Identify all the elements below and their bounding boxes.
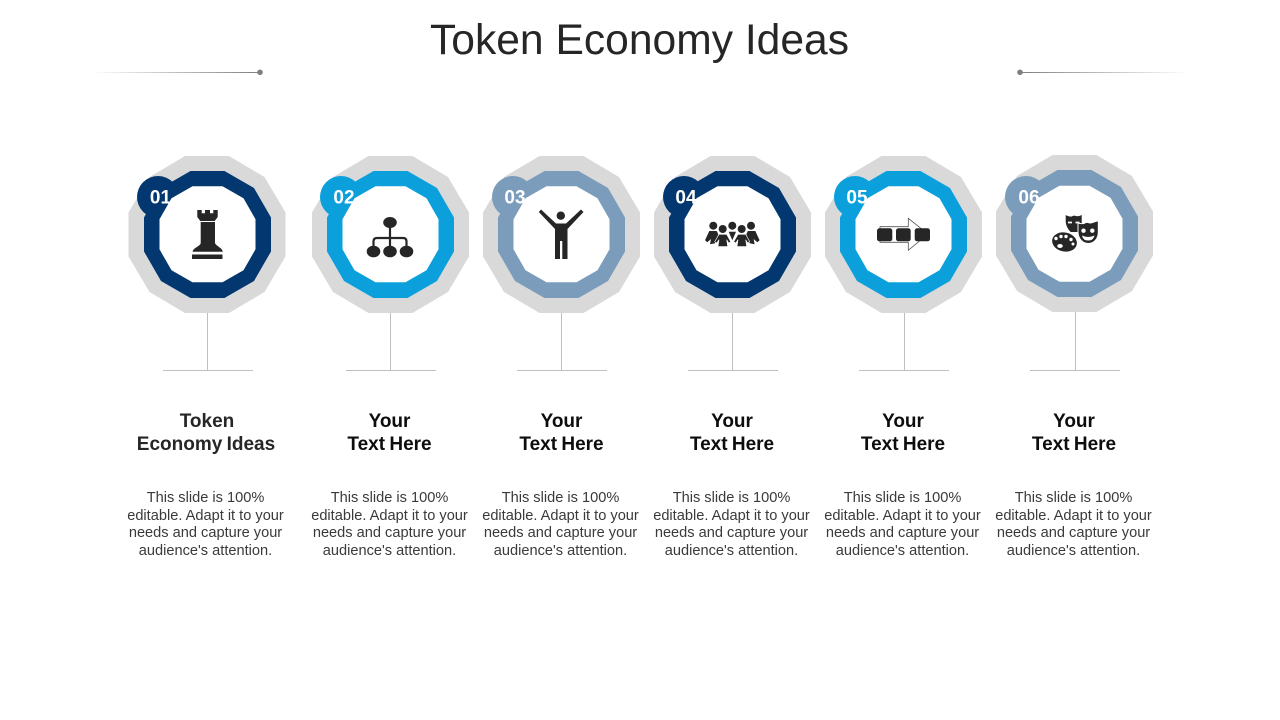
body text 4: editable. Adapt it to your bbox=[653, 508, 810, 524]
heading 5: Your bbox=[882, 411, 925, 432]
body text 3: audience's attention. bbox=[494, 543, 627, 559]
heading 5 bbox=[861, 411, 945, 455]
icon: arrow with three blocks bbox=[877, 218, 930, 250]
heading 5: Text Here bbox=[861, 434, 945, 455]
body text 4: This slide is 100% bbox=[673, 490, 790, 506]
body text 3: This slide is 100% bbox=[502, 490, 619, 506]
body text 6: audience's attention. bbox=[1007, 543, 1140, 559]
badge ring 06: 06 bbox=[1018, 188, 1040, 209]
title rule right bbox=[1017, 70, 1190, 75]
body text 2: editable. Adapt it to your bbox=[311, 508, 468, 524]
body text 6: needs and capture your bbox=[997, 525, 1150, 541]
heading 2: Your bbox=[369, 411, 411, 432]
heading 1: Token bbox=[180, 411, 234, 432]
badge ring 04 bbox=[654, 156, 811, 313]
connector 2 bbox=[346, 313, 436, 370]
title rule left bbox=[90, 70, 263, 75]
connector 1 bbox=[163, 313, 253, 370]
heading 3 bbox=[519, 411, 604, 455]
heading 4: Text Here bbox=[690, 434, 774, 455]
body text 4: audience's attention. bbox=[665, 543, 798, 559]
heading 6: Text Here bbox=[1032, 434, 1116, 455]
column 3 bbox=[482, 156, 640, 559]
badge ring 02 bbox=[312, 156, 469, 313]
heading 6: Your bbox=[1053, 411, 1096, 432]
icon: hierarchy bbox=[367, 217, 413, 257]
heading 2 bbox=[347, 411, 432, 455]
column 5 bbox=[824, 156, 982, 559]
body text 6: editable. Adapt it to your bbox=[995, 508, 1152, 524]
heading 4: Your bbox=[711, 411, 754, 432]
body text 4 bbox=[653, 490, 810, 559]
body text 5 bbox=[824, 490, 981, 559]
badge ring 02: 02 bbox=[333, 188, 355, 209]
body text 3: needs and capture your bbox=[484, 525, 637, 541]
body text 6 bbox=[995, 490, 1152, 559]
icon: chess rook bbox=[192, 210, 223, 259]
column 6 bbox=[995, 155, 1153, 559]
heading 3: Text Here bbox=[519, 434, 604, 455]
badge ring 01 bbox=[128, 156, 286, 313]
icon: person with raised arms bbox=[539, 210, 584, 259]
heading 4 bbox=[690, 411, 774, 455]
badge ring 06 bbox=[996, 155, 1153, 312]
heading 6 bbox=[1032, 411, 1116, 455]
body text 2 bbox=[311, 490, 468, 559]
body text 1 bbox=[127, 490, 284, 559]
body text 1: This slide is 100% bbox=[147, 490, 264, 506]
heading 2: Text Here bbox=[347, 434, 432, 455]
body text 3: editable. Adapt it to your bbox=[482, 508, 639, 524]
badge ring 05 bbox=[825, 156, 982, 313]
connector 3 bbox=[517, 313, 607, 370]
badge ring 05: 05 bbox=[846, 188, 868, 209]
badge ring 04: 04 bbox=[675, 188, 697, 209]
badge ring 03 bbox=[483, 156, 640, 313]
badge ring 03: 03 bbox=[504, 188, 526, 209]
icon: group of people bbox=[705, 222, 760, 246]
body text 3 bbox=[482, 490, 639, 559]
body text 1: editable. Adapt it to your bbox=[127, 508, 284, 524]
badge ring 01: 01 bbox=[150, 188, 171, 209]
body text 2: needs and capture your bbox=[313, 525, 466, 541]
heading 3: Your bbox=[541, 411, 583, 432]
body text 4: needs and capture your bbox=[655, 525, 808, 541]
connector 6 bbox=[1030, 312, 1120, 370]
title: Token Economy Ideas bbox=[430, 16, 849, 64]
body text 5: needs and capture your bbox=[826, 525, 979, 541]
body text 1: needs and capture your bbox=[129, 525, 282, 541]
heading 1 bbox=[137, 411, 275, 455]
body text 2: audience's attention. bbox=[323, 543, 456, 559]
column 1 bbox=[127, 156, 286, 559]
body text 5: This slide is 100% bbox=[844, 490, 961, 506]
body text 1: audience's attention. bbox=[139, 543, 272, 559]
heading 1: Economy Ideas bbox=[137, 434, 275, 455]
body text 6: This slide is 100% bbox=[1015, 490, 1132, 506]
column 2 bbox=[311, 156, 469, 559]
connector 5 bbox=[859, 313, 949, 370]
body text 5: audience's attention. bbox=[836, 543, 969, 559]
icon: theatre masks and palette bbox=[1049, 215, 1098, 256]
body text 5: editable. Adapt it to your bbox=[824, 508, 981, 524]
column 4 bbox=[653, 156, 811, 559]
body text 2: This slide is 100% bbox=[331, 490, 448, 506]
connector 4 bbox=[688, 313, 778, 370]
